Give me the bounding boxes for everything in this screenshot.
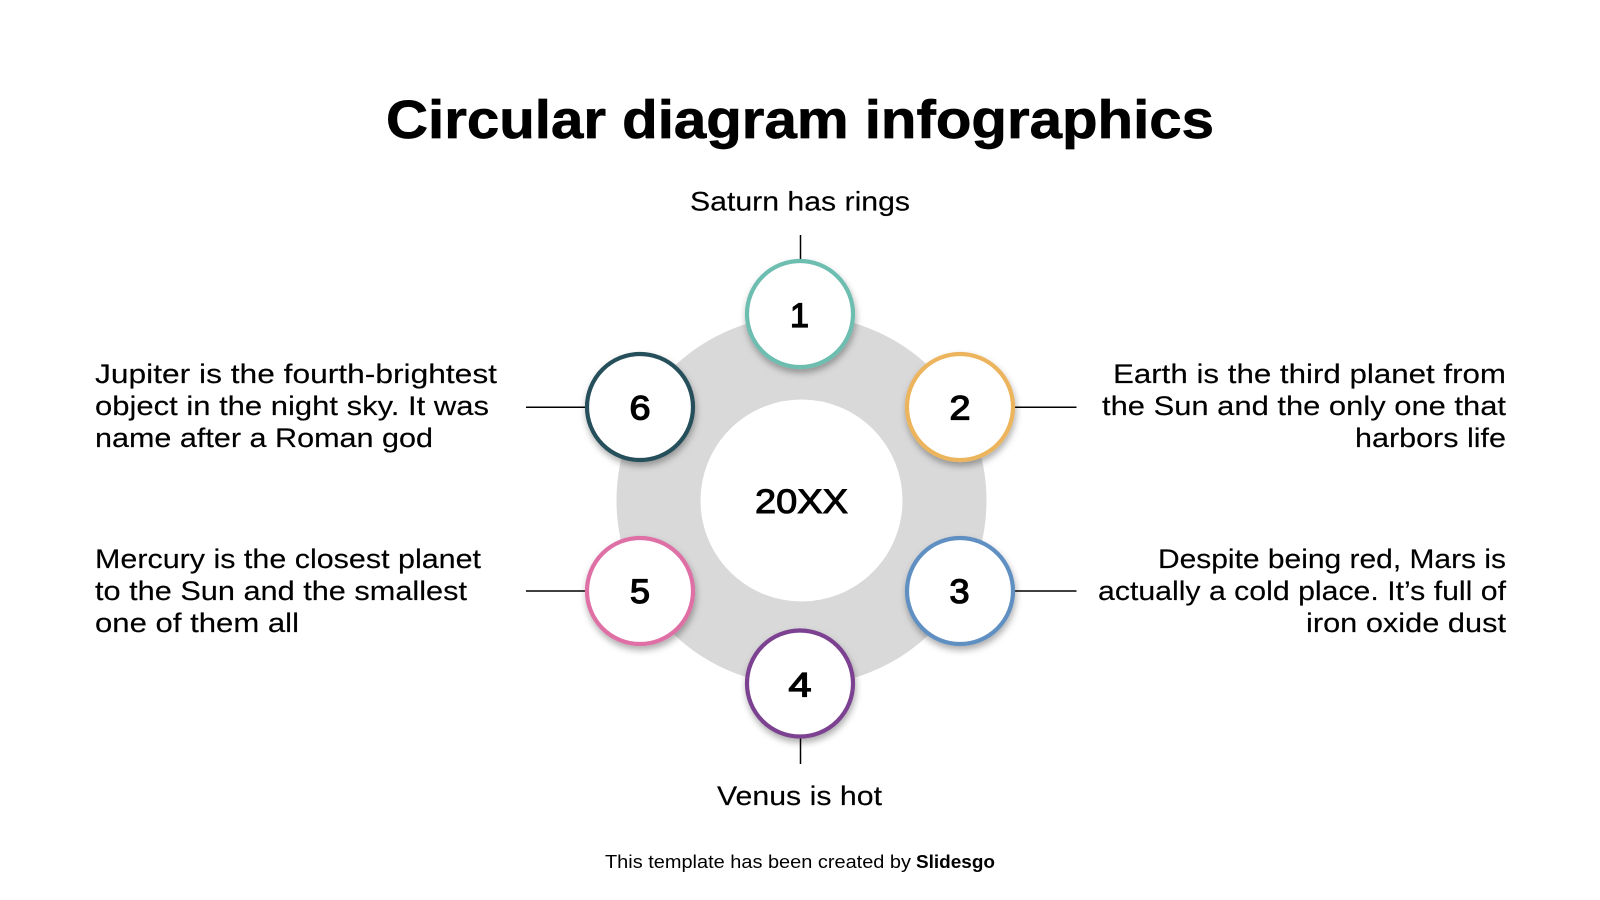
node 6 [587,354,693,460]
center label: 20XX [755,483,848,521]
node 1 [747,261,853,367]
text block: Mars: iron oxide dust [1306,608,1507,638]
text block: Mercury: one of them all [95,608,299,638]
text block: Mercury [95,544,482,638]
node 3 [907,538,1013,644]
label: Saturn: Saturn has rings [690,186,910,216]
text block: Jupiter: name after a Roman god [95,423,433,453]
text block: Mercury: Mercury is the closest planet [95,544,482,574]
node 2: 2 [950,390,970,428]
text block: Jupiter: object in the night sky. It was [95,391,489,421]
connector lines [526,235,1076,764]
text block: Earth: harbors life [1355,423,1506,453]
node 4 [747,630,853,736]
node 5: 5 [630,573,650,611]
text block: Earth: the Sun and the only one that [1102,391,1507,421]
node 5 [587,538,693,644]
label: Venus: Venus is hot [717,781,883,811]
node 3: 3 [950,573,970,611]
text block: Mercury: to the Sun and the smallest [95,576,468,606]
node 6: 6 [630,390,650,428]
footer credit: Slidesgo [916,852,995,872]
node 2 [907,354,1013,460]
central ring [658,358,944,644]
text block: Jupiter [95,359,498,453]
title: Circular diagram infographics [386,90,1214,150]
node 4: 4 [788,666,812,704]
text block: Mars: actually a cold place. It’s full of [1098,576,1507,606]
text block: Mars: Despite being red, Mars is [1158,544,1506,574]
text block: Mars [1098,544,1507,638]
node 1: 1 [790,297,809,335]
text block: Jupiter: Jupiter is the fourth-brightest [95,359,498,389]
text block: Earth: Earth is the third planet from [1113,359,1506,389]
footer credit: This template has been created by [605,852,911,872]
text block: Earth [1102,359,1507,453]
